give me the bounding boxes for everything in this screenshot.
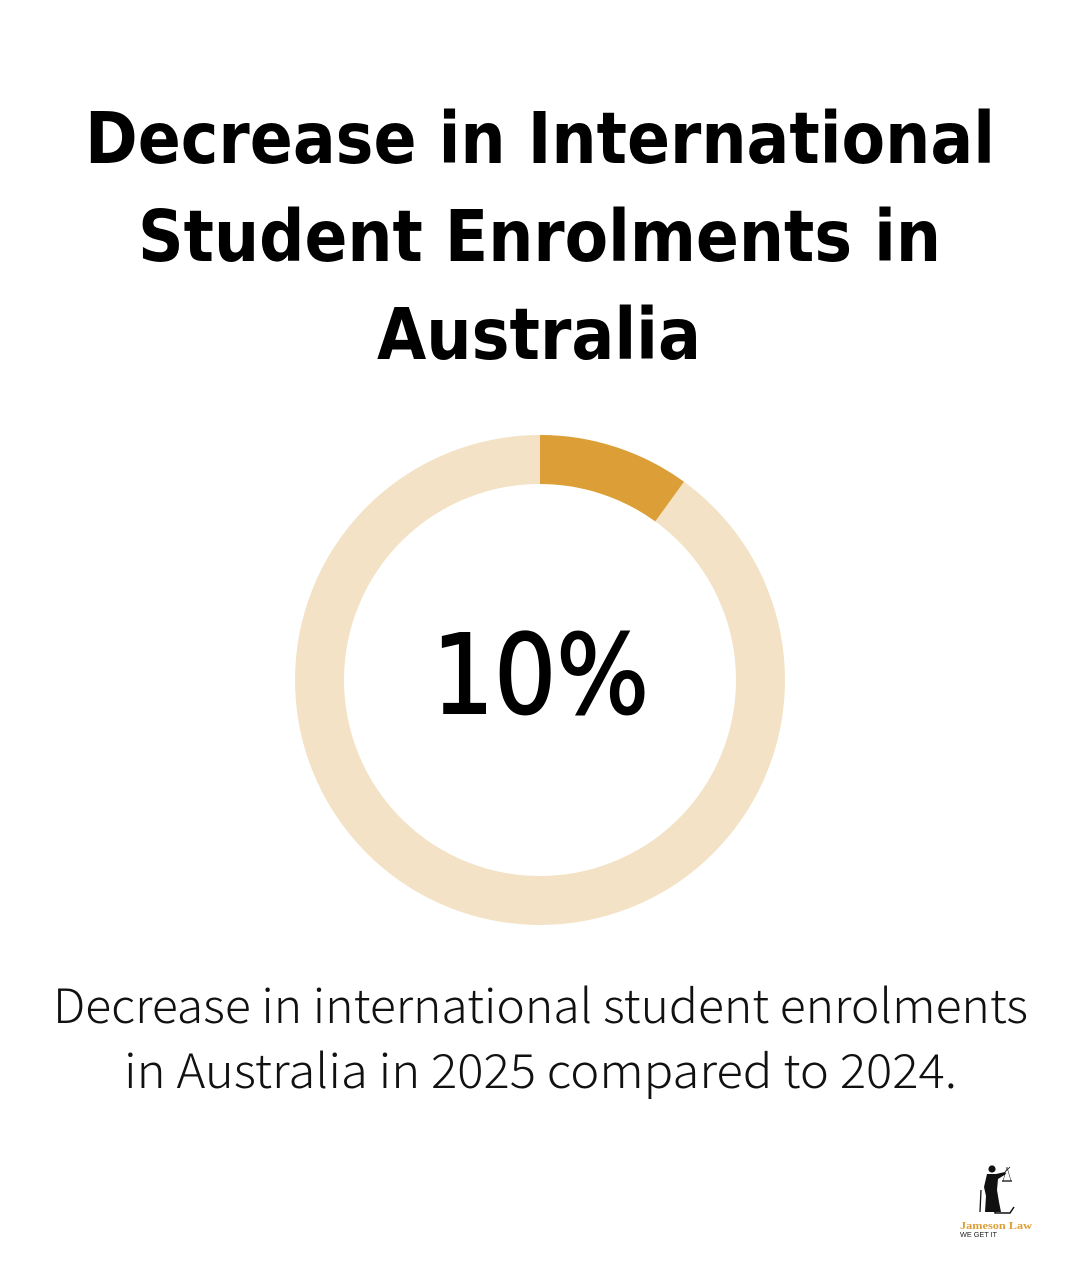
description text: Decrease in international student enrolments [53, 968, 1028, 1037]
logo tagline: WE GET IT [960, 1232, 998, 1239]
donut chart: 10 percent [320, 459, 760, 900]
description text: in Australia in 2025 compared to 2024. [124, 1033, 957, 1102]
donut highlighted segment [540, 459, 670, 502]
logo: Jameson Law [960, 1165, 1032, 1239]
title: Australia [377, 293, 701, 376]
donut track [320, 460, 760, 900]
title: Decrease in International [85, 97, 995, 180]
center value: 10% [432, 611, 649, 739]
title [85, 97, 995, 376]
title: Student Enrolments in [138, 195, 941, 278]
logo name: Jameson Law [960, 1220, 1032, 1232]
icon: lady justice [980, 1165, 1014, 1213]
description text [53, 968, 1028, 1102]
